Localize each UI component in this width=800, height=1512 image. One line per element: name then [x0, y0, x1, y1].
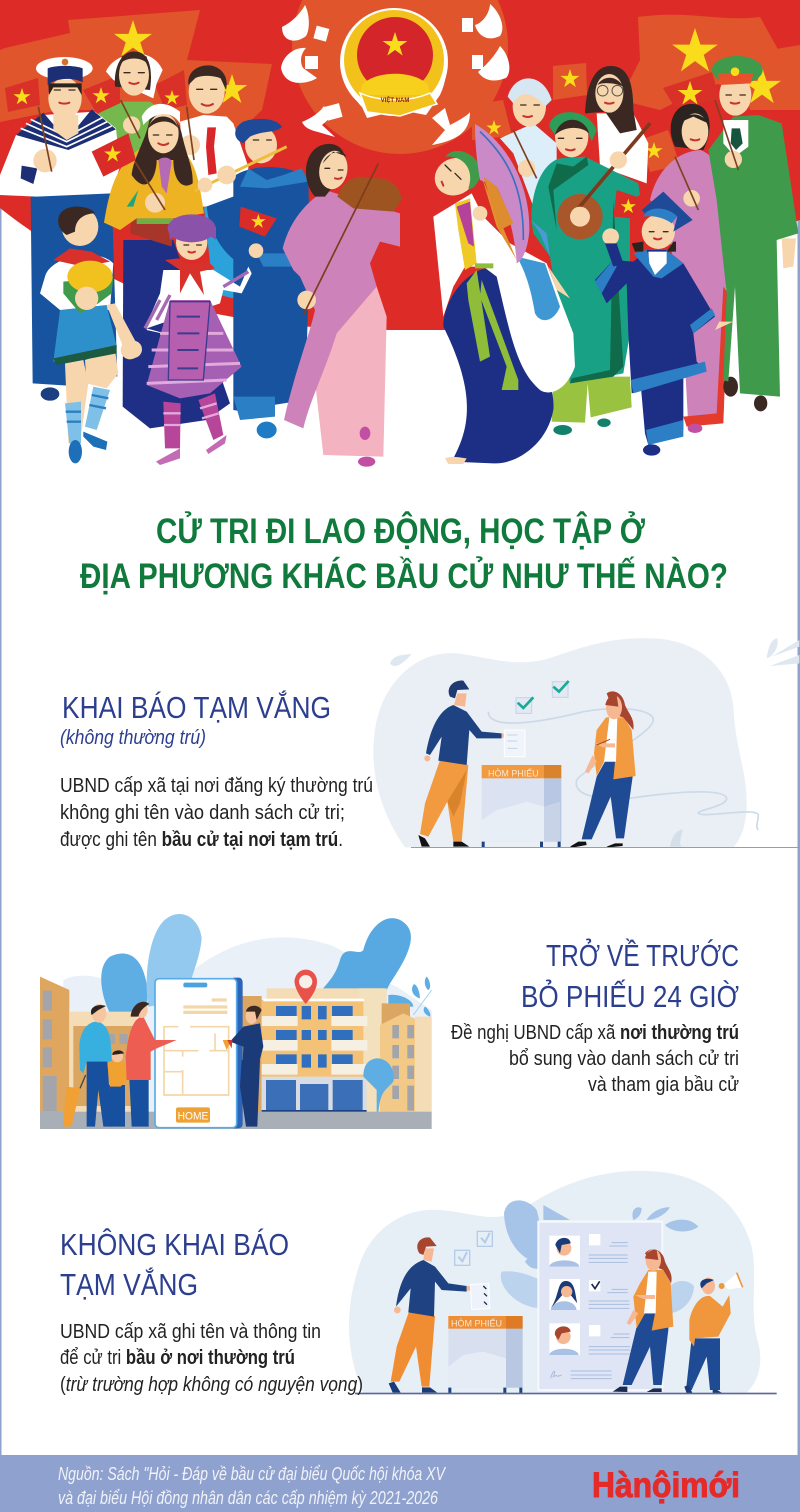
white doves — [281, 4, 509, 145]
heading 1: KHAI BÁO TẠM VẮNG — [62, 689, 331, 725]
body 1: được ghi tên bầu cử tại nơi tạm trú. — [60, 829, 343, 851]
person: woman in pink ao dai — [650, 104, 775, 433]
hero illustration: voters in front of red flag — [0, 0, 800, 467]
man with megaphone — [684, 1273, 743, 1393]
body 2: Đề nghị UBND cấp xã nơi thường trú — [451, 1022, 739, 1044]
woman in orange jacket — [613, 1249, 673, 1392]
buildings — [40, 977, 432, 1113]
body 3: UBND cấp xã ghi tên và thông tin — [60, 1321, 321, 1343]
flag folds — [0, 0, 800, 154]
heading 2: TRỞ VỀ TRƯỚC — [546, 937, 739, 973]
red flag background — [0, 0, 800, 330]
ballot box — [448, 1316, 523, 1393]
ballot box: HÒM PHIẾU — [488, 768, 539, 778]
title: CỬ TRI ĐI LAO ĐỘNG, HỌC TẬP Ở — [156, 511, 645, 551]
person: sailor — [0, 57, 120, 401]
body 2: bổ sung vào danh sách cử tri — [509, 1048, 739, 1070]
heading 2 — [521, 937, 739, 1014]
person: boy with flowers — [40, 207, 139, 463]
person: violinist in pink ao dai — [283, 144, 402, 467]
person: dancer with fan — [429, 124, 575, 464]
person: woman in green with scarf — [98, 51, 163, 167]
section 1: khai báo tạm vắng — [60, 638, 800, 851]
agent with keys — [223, 1006, 263, 1127]
right group of people — [429, 56, 798, 464]
man voting — [389, 1237, 476, 1393]
body 1: UBND cấp xã tại nơi đăng ký thường trú — [60, 775, 373, 797]
location pin — [295, 970, 317, 1004]
logo: Hànộimới: Hànộimới — [592, 1466, 740, 1505]
illustration 3: candidate list and voters — [349, 1171, 777, 1394]
person: man with red tie — [180, 65, 248, 207]
heading 3: KHÔNG KHAI BÁO — [60, 1227, 289, 1262]
illustration 1: voting scene — [373, 638, 800, 848]
left group of people — [0, 51, 402, 467]
check boxes — [455, 1231, 492, 1265]
woman in orange jacket — [570, 691, 636, 847]
person: graduate girl — [595, 190, 733, 456]
person: man in light blue shirt — [500, 78, 557, 207]
source note: Nguồn: Sách "Hỏi - Đáp về bầu cử đại biểu Quốc hội khóa XV — [58, 1464, 447, 1484]
heading 2: BỎ PHIẾU 24 GIỜ — [521, 978, 739, 1014]
state emblem: VIỆT NAM — [381, 96, 409, 104]
person: blue ethnic flute player — [195, 119, 310, 438]
phone with floor plan — [155, 978, 243, 1128]
body 3 — [60, 1321, 363, 1396]
leaves — [501, 1200, 698, 1313]
person: girl in purple ethnic dress — [125, 207, 277, 465]
person: soldier — [708, 56, 798, 411]
person: green dress woman with lute — [531, 112, 650, 435]
section 3: không khai báo tạm vắng — [60, 1171, 777, 1396]
ballot box — [482, 765, 561, 847]
body 1: không ghi tên vào danh sách cử tri; — [60, 802, 345, 824]
footer bar — [0, 1455, 800, 1512]
subheading 1: (không thường trú) — [60, 727, 206, 749]
state emblem — [340, 8, 448, 118]
source note — [58, 1464, 447, 1508]
title — [80, 511, 728, 596]
small flags and stars — [5, 20, 781, 172]
person: woman in yellow with navy skirt — [92, 104, 230, 428]
man voting — [418, 681, 511, 847]
candidate board — [538, 1222, 662, 1390]
ballot box: HÒM PHIẾU — [451, 1319, 502, 1329]
source note: và đại biểu Hội đồng nhân dân các cấp nhiệm kỳ 2021-2026 — [58, 1488, 439, 1508]
body 2 — [451, 1022, 739, 1096]
ballot paper — [470, 1284, 490, 1309]
ballot paper — [504, 730, 525, 757]
body 3: để cử tri bầu ở nơi thường trú — [60, 1347, 295, 1369]
body 2: và tham gia bầu cử — [588, 1074, 739, 1096]
person: girl with glasses in white — [585, 66, 648, 183]
phone with floor plan: HOME — [178, 1110, 209, 1122]
family — [63, 1002, 177, 1127]
illustration 2: family, phone and building — [40, 914, 432, 1129]
section 2: trở về trước bỏ phiếu 24 giờ — [40, 914, 739, 1129]
heading 3 — [60, 1227, 289, 1302]
body 1 — [60, 775, 373, 851]
check boxes — [516, 681, 569, 713]
heading 3: TẠM VẮNG — [60, 1266, 198, 1302]
body 3: (trừ trường hợp không có nguyện vọng) — [60, 1374, 363, 1396]
